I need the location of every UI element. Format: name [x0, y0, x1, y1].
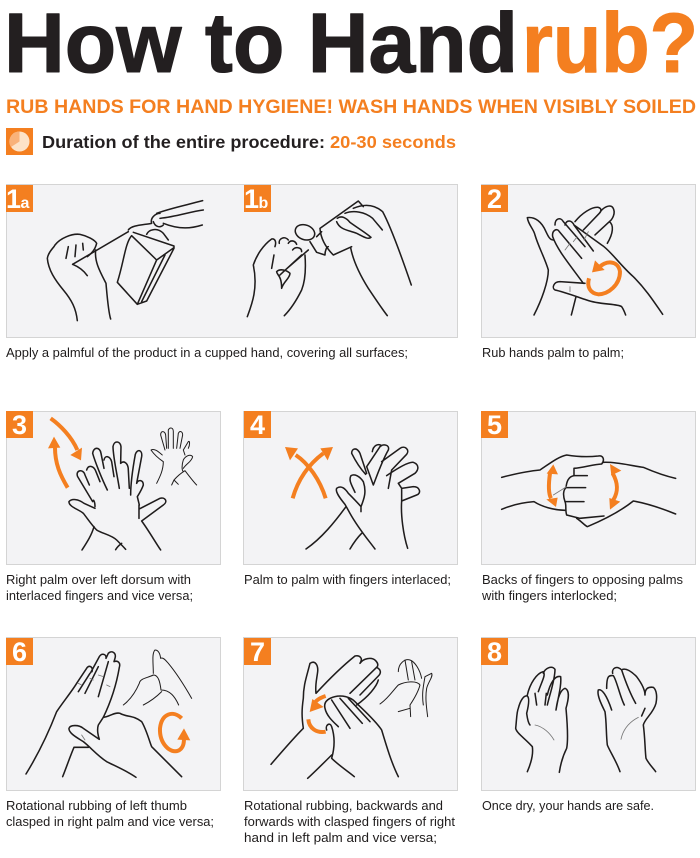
panel: step 6: [6, 637, 220, 790]
badge: 5: 5: [487, 410, 502, 440]
panel: step 8: [481, 637, 696, 790]
badge: 2: [481, 184, 508, 214]
caption: step 5: with fingers interlocked;: [481, 588, 617, 603]
caption: step 6: Rotational rubbing of left thumb: [6, 798, 187, 813]
badge: 1a: [6, 184, 33, 214]
panel: step 1: [6, 184, 458, 338]
illustration: palm over dorsum: [48, 418, 197, 550]
caption: step 6: [6, 798, 214, 829]
badge: 1b: [244, 184, 271, 214]
badge: 8: [481, 637, 508, 667]
caption: step 7: Rotational rubbing, backwards and: [244, 798, 443, 813]
panel: step 7: [244, 637, 458, 790]
illustration: clasped fingers in palm: [271, 656, 432, 778]
badge: 2: 2: [487, 184, 502, 214]
caption: step 7: forwards with clasped fingers of right: [244, 814, 455, 829]
caption: step 8: Once dry, your hands are safe.: [482, 798, 654, 813]
illustration: backs of fingers: [502, 455, 676, 527]
caption: step 3: Right palm over left dorsum with: [6, 572, 191, 587]
illustration: bottle squeezed into hand: [247, 201, 411, 317]
caption: step 7: hand in left palm and vice versa;: [244, 830, 437, 845]
duration text: Duration of the entire procedure:: [42, 132, 325, 152]
illustration: palm to palm: [527, 206, 663, 315]
icon: clock: [6, 128, 33, 155]
duration text: [42, 132, 456, 152]
caption: step 3: interlaced fingers and vice versa;: [6, 588, 193, 603]
caption: step 4: Palm to palm with fingers interlaced;: [244, 572, 451, 587]
badge: 5: [481, 410, 508, 440]
panel: step 5: [481, 410, 696, 564]
caption: step 5: [481, 572, 683, 603]
badge: 4: [244, 410, 271, 440]
caption: step 7: [244, 798, 455, 845]
badge: 3: 3: [12, 410, 27, 440]
panel: step 3: [6, 410, 220, 564]
badge: 8: 8: [487, 637, 502, 667]
caption: step 5: Backs of fingers to opposing palms: [482, 572, 683, 587]
badge: 7: [244, 637, 271, 667]
panel: step 2: [481, 184, 696, 338]
panel: step 4: [244, 410, 458, 564]
badge: 1a: a: [20, 195, 30, 212]
duration text: 20-30 seconds: [330, 132, 456, 152]
illustration: pump bottle and cupped hand: [47, 201, 203, 321]
badge: 7: 7: [250, 637, 265, 667]
caption: step 2: Rub hands palm to palm;: [482, 345, 624, 360]
badge: 1b: b: [258, 195, 268, 212]
illustration: fingers interlaced: [285, 445, 420, 549]
caption: step 6: clasped in right palm and vice versa;: [6, 814, 214, 829]
badge: 1b: 1: [244, 184, 259, 214]
illustration: dry hands: [516, 667, 657, 772]
caption: step 1: Apply a palmful of the product in a cupped hand, covering all surfaces;: [6, 345, 408, 360]
badge: 6: [6, 637, 33, 667]
illustration: rotational thumb rubbing: [26, 650, 192, 777]
subtitle: RUB HANDS FOR HAND HYGIENE! WASH HANDS WHEN VISIBLY SOILED: [6, 96, 696, 118]
badge: 1a: 1: [6, 184, 21, 214]
badge: 3: [6, 410, 33, 440]
caption: step 3: [6, 572, 193, 603]
badge: 4: 4: [250, 410, 265, 440]
badge: 6: 6: [12, 637, 27, 667]
